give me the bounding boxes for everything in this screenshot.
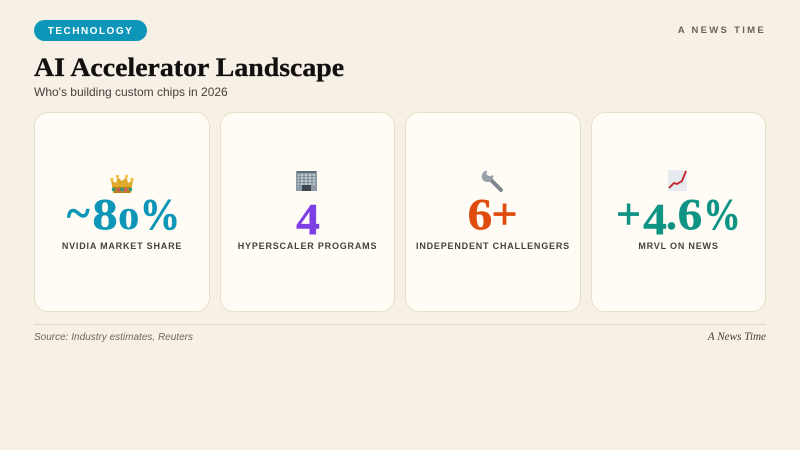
stat value: + bbox=[616, 190, 641, 239]
brand label: A NEWS TIME bbox=[678, 25, 766, 36]
stat value: 0 bbox=[118, 201, 139, 236]
icon: wrench bbox=[482, 170, 504, 192]
icon: chart increasing bbox=[668, 170, 687, 191]
source text: Source: Industry estimates, Reuters bbox=[34, 332, 193, 343]
stat value: 8 bbox=[92, 190, 117, 239]
panel: Nvidia market share bbox=[34, 112, 210, 312]
stat value bbox=[66, 189, 180, 239]
stat value: 6 bbox=[468, 190, 492, 239]
stat value: 4 bbox=[643, 195, 667, 244]
title: AI Accelerator Landscape bbox=[34, 53, 344, 82]
category badge: TECHNOLOGY bbox=[48, 26, 133, 36]
stat value bbox=[468, 190, 518, 239]
stat value: % bbox=[140, 190, 180, 239]
stat value bbox=[616, 190, 741, 244]
stat label: INDEPENDENT CHALLENGERS bbox=[416, 241, 570, 251]
category badge bbox=[34, 20, 147, 41]
footer source bbox=[34, 324, 766, 345]
subtitle: Who's building custom chips in 2026 bbox=[34, 85, 228, 99]
stat value: % bbox=[703, 190, 741, 239]
panel: MRVL on news bbox=[591, 112, 766, 312]
footer brand: A News Time bbox=[708, 331, 766, 343]
stat label: MRVL ON NEWS bbox=[638, 241, 719, 251]
icon: office building bbox=[296, 171, 317, 191]
stat value: + bbox=[491, 190, 518, 239]
stat value: 4 bbox=[296, 195, 319, 244]
panel: independent challengers bbox=[405, 112, 581, 312]
stat label: HYPERSCALER PROGRAMS bbox=[238, 241, 377, 251]
stat label: NVIDIA MARKET SHARE bbox=[62, 241, 182, 251]
panel: hyperscaler programs bbox=[220, 112, 395, 312]
icon: crown bbox=[110, 174, 134, 193]
stat value: 6 bbox=[678, 190, 702, 239]
stat value: . bbox=[666, 190, 677, 239]
stat value: ~ bbox=[67, 189, 90, 238]
